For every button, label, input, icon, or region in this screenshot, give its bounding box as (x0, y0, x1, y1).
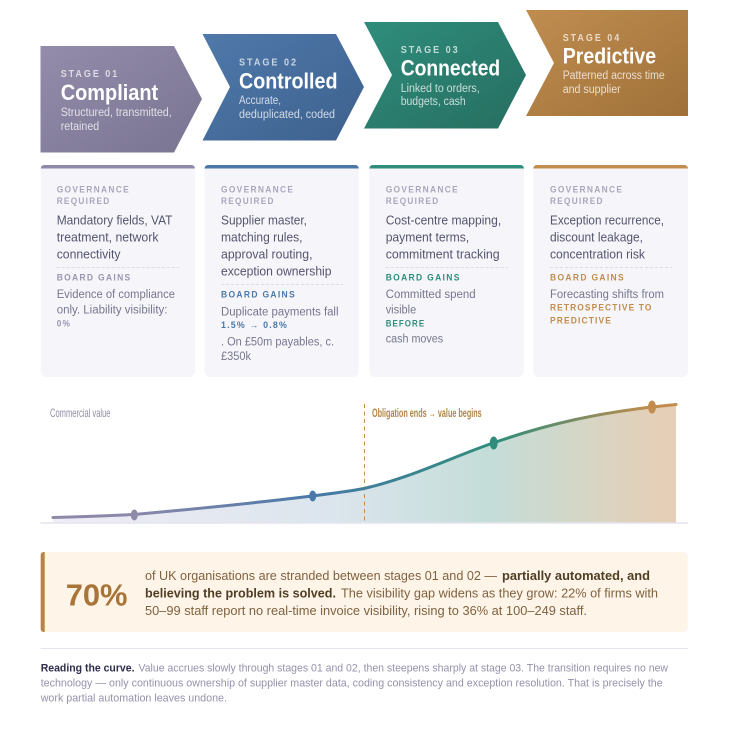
stage 02 subtitle (239, 95, 335, 121)
board gains text: Committed spend (386, 289, 476, 301)
footnote: reading the curve: technology — only continuous ownership of supplier master data, coding consistency and exception resolution. That is precisely the (41, 678, 663, 690)
stage 03 subtitle: budgets, cash (401, 96, 466, 108)
stage 02 subtitle: deduplicated, coded (239, 109, 335, 121)
card background (204, 165, 359, 377)
governance text: treatment, network (57, 230, 159, 244)
value curve line (53, 404, 676, 518)
governance text (550, 214, 664, 262)
stage 04 block (526, 10, 688, 116)
governance text: payment terms, (386, 230, 469, 244)
callout background (41, 552, 688, 632)
board gains heading: BOARD GAINS (221, 290, 296, 300)
board gains text (221, 306, 338, 363)
card background (533, 165, 688, 377)
stage 01 subtitle (61, 107, 172, 133)
panel: stage 04 card (533, 165, 688, 377)
stage 03 title: Connected (401, 56, 500, 80)
panel: stage 01 card (41, 165, 195, 377)
area under curve (53, 404, 676, 523)
board gains text: BEFORE (386, 319, 425, 329)
chevron shape (364, 22, 526, 128)
board gains text: Evidence of compliance (57, 289, 175, 301)
board gains text: visible (386, 304, 416, 316)
callout text: believing the problem is solved. (145, 586, 336, 601)
governance text: Cost-centre mapping, (386, 214, 501, 228)
board gains text: only. Liability visibility: (57, 304, 168, 316)
governance text: Exception recurrence, (550, 214, 664, 228)
governance heading (57, 184, 130, 206)
stage 04 title: Predictive (563, 44, 656, 68)
governance text: Supplier master, (221, 214, 307, 228)
card top accent (41, 165, 195, 168)
stage 01 subtitle: Structured, transmitted, (61, 107, 172, 119)
big number: 70% (66, 578, 128, 613)
chart baseline (40, 522, 688, 524)
governance heading: GOVERNANCE (386, 184, 459, 194)
value curve chart (40, 400, 688, 523)
governance text: matching rules, (221, 230, 302, 244)
governance text: commitment tracking (386, 248, 500, 262)
stage 02 label: STAGE 02 (239, 58, 298, 68)
block shape (526, 10, 688, 116)
governance heading: REQUIRED (386, 196, 440, 206)
stage 02 chevron (202, 34, 364, 140)
panel: stage 03 card (369, 165, 524, 377)
board gains text (57, 289, 175, 329)
callout text: of UK organisations are stranded between stages 01 and 02 — (145, 568, 497, 583)
board gains text: PREDICTIVE (550, 315, 612, 325)
stage 02 subtitle: Accurate, (239, 95, 281, 107)
footnote: reading the curve (40, 663, 668, 705)
stage 04 label: STAGE 04 (563, 33, 621, 44)
stage 01 chevron (40, 46, 202, 152)
board gains heading: BOARD GAINS (57, 273, 132, 283)
marker: stage 01 (131, 510, 138, 520)
obligation threshold line (364, 404, 366, 523)
chevron shape (202, 34, 364, 140)
stage 04 subtitle: Patterned across time (563, 70, 665, 82)
governance text: concentration risk (550, 248, 646, 262)
stage 04 subtitle: and supplier (563, 84, 621, 96)
governance heading: REQUIRED (57, 196, 110, 206)
governance heading (386, 184, 459, 206)
marker: stage 04 (648, 400, 656, 414)
card top accent (204, 165, 359, 168)
governance text (221, 214, 332, 278)
board gains text: 1.5% → 0.8% (221, 320, 288, 330)
governance text: Mandatory fields, VAT (57, 214, 173, 228)
board gains text (550, 289, 664, 325)
stage 01 subtitle: retained (61, 121, 99, 133)
governance text: exception ownership (221, 264, 332, 278)
board gains text: Duplicate payments fall (221, 306, 338, 318)
governance heading: REQUIRED (221, 196, 275, 206)
callout text: partially automated, and (502, 568, 650, 583)
marker: stage 03 (490, 436, 498, 450)
card background (369, 165, 524, 377)
governance heading: GOVERNANCE (57, 184, 130, 194)
governance heading: GOVERNANCE (550, 184, 623, 194)
board gains text: RETROSPECTIVE TO (550, 303, 652, 313)
callout: 70% statistic (41, 552, 688, 632)
board gains text: . On £50m payables, c. (221, 336, 334, 348)
board gains heading: BOARD GAINS (386, 273, 461, 283)
governance text (386, 214, 501, 262)
governance text: discount leakage, (550, 230, 643, 244)
governance heading (550, 184, 623, 206)
governance text: connectivity (57, 248, 121, 262)
stage 01 title: Compliant (61, 80, 159, 105)
card background (41, 165, 195, 377)
stage 03 label: STAGE 03 (401, 45, 460, 56)
callout text: The visibility gap widens as they grow: 22% of firms with (341, 586, 658, 601)
card top accent (533, 165, 688, 168)
panel: stage 02 card (204, 165, 359, 377)
board gains text: cash moves (386, 334, 443, 346)
board gains text: £350k (221, 351, 251, 363)
footnote: reading the curve: Reading the curve. (41, 663, 135, 675)
footnote: reading the curve: work partial automation leaves undone. (40, 693, 227, 705)
board gains text: 0% (57, 319, 71, 329)
axis label: Commercial value (50, 406, 111, 420)
stage 02 title: Controlled (239, 68, 338, 94)
callout text (145, 568, 658, 618)
board gains text: Forecasting shifts from (550, 289, 664, 301)
board gains heading: BOARD GAINS (550, 273, 625, 283)
stage 01 label: STAGE 01 (61, 69, 119, 80)
stage 03 subtitle: Linked to orders, (401, 83, 480, 95)
stage 03 subtitle (401, 83, 480, 108)
governance heading (221, 184, 294, 206)
governance text: approval routing, (221, 248, 312, 262)
card top accent (369, 165, 524, 168)
callout accent bar (41, 552, 45, 632)
threshold label: Obligation ends → value begins (372, 406, 482, 420)
stage 04 subtitle (563, 70, 665, 96)
chevron shape (40, 46, 202, 152)
stage 03 chevron (364, 22, 526, 128)
callout text: 50–99 staff report no real-time invoice visibility, rising to 36% at 100–249 staff. (145, 603, 587, 618)
governance heading: REQUIRED (550, 196, 604, 206)
marker: stage 02 (309, 490, 316, 502)
governance text (57, 214, 173, 262)
board gains text (386, 289, 476, 346)
footnote: reading the curve: Value accrues slowly through stages 01 and 02, then steepens sharply at stage 03. The transition requires no new (138, 663, 668, 675)
governance heading: GOVERNANCE (221, 184, 294, 194)
